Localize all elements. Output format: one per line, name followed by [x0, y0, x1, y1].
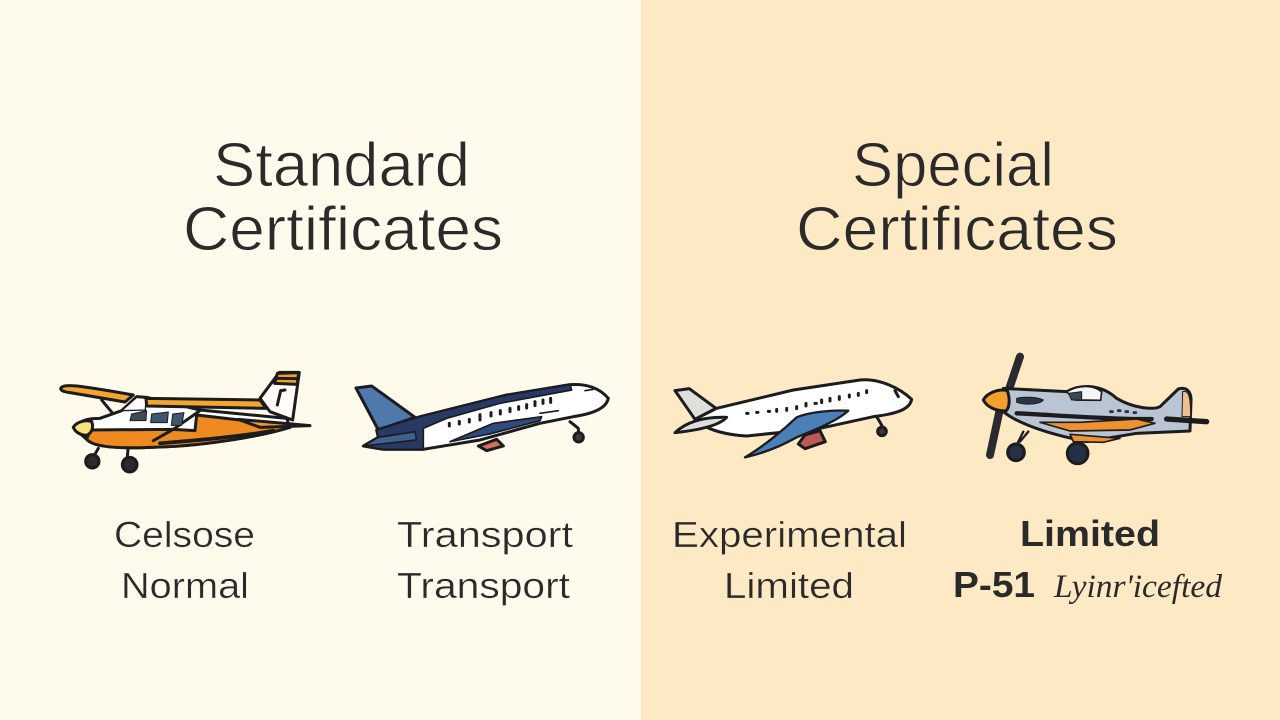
icon: P-51 propeller fighter: [983, 357, 1207, 464]
icon: blue tail transport jet: [356, 384, 608, 451]
heading: Special Certificates: [796, 131, 1118, 264]
label: Transport Transport: [397, 514, 573, 606]
icon: orange and white light aircraft: [61, 372, 310, 472]
icon: white jet with blue wing: [675, 380, 912, 457]
label: Transport Transport: Transport: [397, 565, 570, 606]
heading: Standard Certificates: Certificates: [183, 195, 503, 264]
heading: Special Certificates: Certificates: [796, 195, 1118, 264]
label: Limited P-51: Lyinr'icefted: [1053, 569, 1222, 605]
heading: Standard Certificates: Standard: [213, 131, 470, 200]
label: Celsose Normal: Normal: [121, 565, 249, 606]
panel: standard certificates background: [0, 0, 641, 720]
heading: Standard Certificates: [183, 131, 503, 264]
label: Celsose Normal: Celsose: [114, 514, 255, 555]
panel: special certificates background: [641, 0, 1280, 720]
label: Celsose Normal: [114, 514, 255, 606]
label: Limited P-51: P-51: [953, 564, 1035, 605]
label: Experimental Limited: Limited: [724, 565, 854, 606]
label: Experimental Limited: [672, 514, 907, 606]
label: Limited P-51: Limited: [1020, 513, 1160, 554]
heading: Special Certificates: Special: [852, 131, 1054, 200]
label: Transport Transport: Transport: [397, 514, 573, 555]
label: Limited P-51: [953, 513, 1222, 605]
label: Experimental Limited: Experimental: [672, 514, 907, 555]
